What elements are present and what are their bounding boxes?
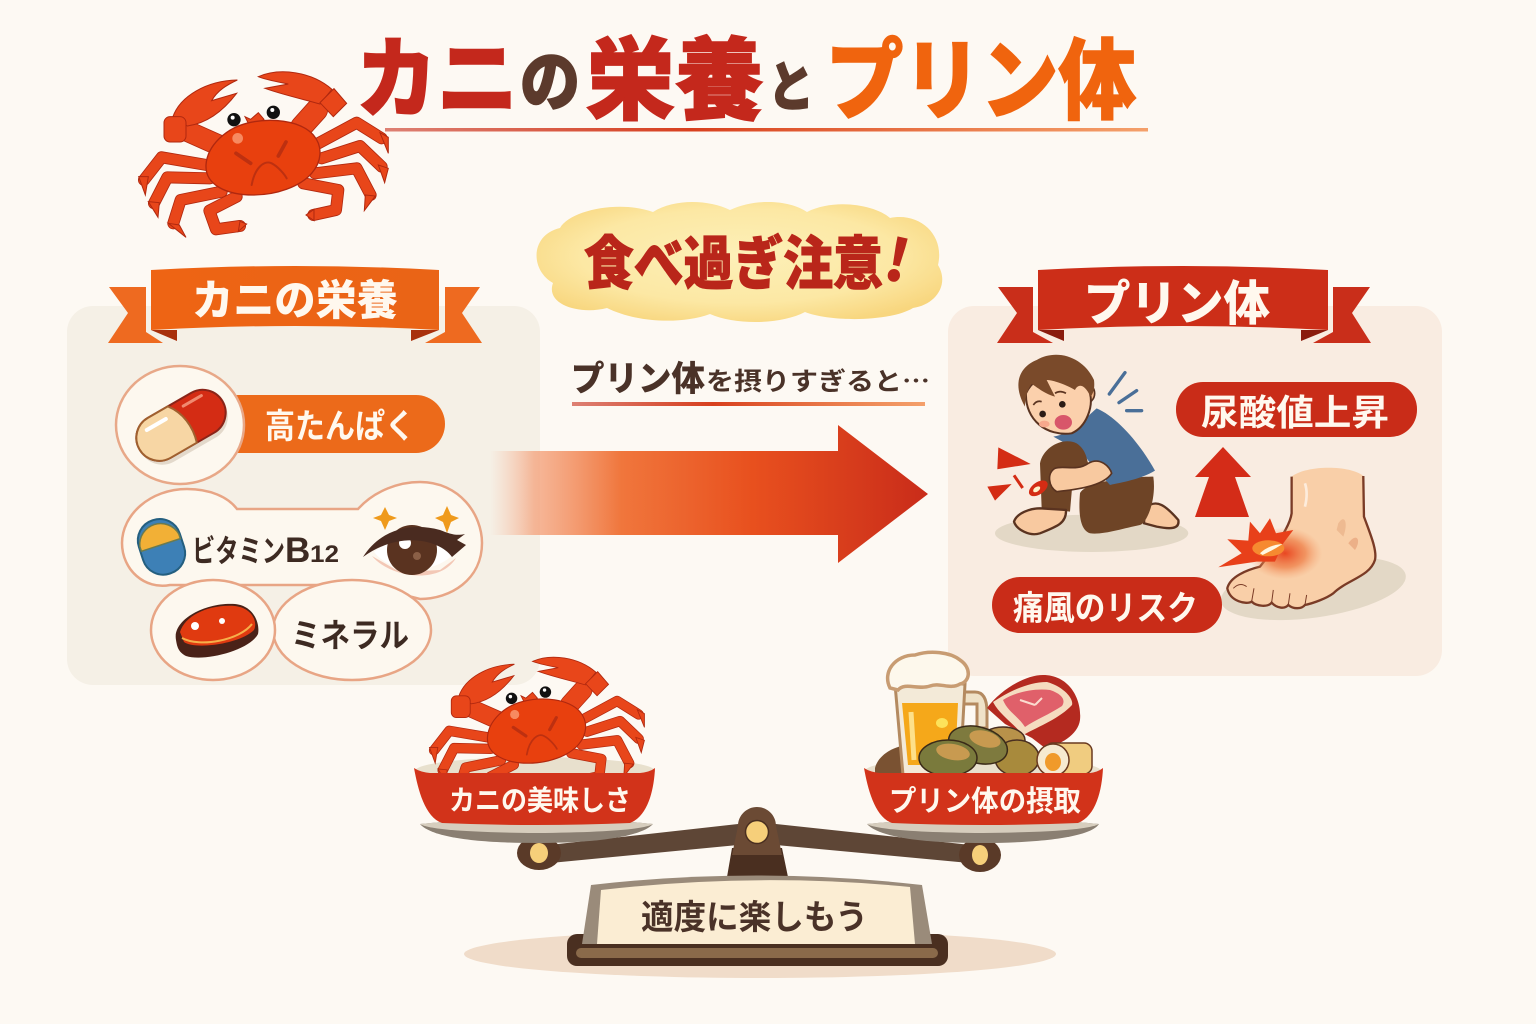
left bowl: [414, 768, 655, 825]
illustration: person holding knee: [987, 355, 1188, 552]
ribbon: nutrition heading: [108, 266, 482, 343]
panel: nutrition: [67, 306, 540, 685]
title: 栄養: [586, 8, 764, 138]
right bowl inside: [865, 757, 1101, 785]
plaque: [567, 876, 948, 966]
ribbon: purine heading: プリン体: [1084, 264, 1270, 334]
text: too much purine: を摂りすぎると…: [706, 362, 930, 398]
ribbon: nutrition heading: カニの栄養: [192, 267, 398, 328]
icon: mineral stone: [176, 604, 258, 658]
icon: vitamin capsule: [132, 514, 191, 580]
title: カニ: [356, 9, 518, 136]
icon: eye: [363, 506, 466, 576]
ribbon: purine heading: [997, 264, 1371, 343]
text: too much purine: [571, 351, 930, 406]
icon: crab (top): [139, 72, 388, 237]
icon: beer mug: [888, 652, 987, 775]
icon: foods: [919, 720, 1092, 776]
text: too much purine: プリン体: [571, 351, 705, 402]
right plate: [867, 818, 1099, 843]
left bowl: カニの美味しさ: [449, 779, 631, 819]
item: mineral: ミネラル: [291, 609, 409, 657]
title: と: [768, 43, 814, 122]
title underline: [385, 128, 1148, 132]
item: high protein: 高たんぱく: [265, 399, 415, 448]
plaque: 適度に楽しもう: [641, 890, 868, 939]
label: gout risk: 痛風のリスク: [1013, 581, 1198, 630]
arrow: [490, 425, 928, 563]
left plate: [420, 818, 653, 843]
item: vitamin B12: ビタミン: [192, 526, 285, 571]
item: vitamin B12: 12: [310, 541, 339, 568]
shadow under scale: [464, 930, 1056, 978]
item: vitamin B12: B: [285, 531, 310, 570]
left bowl inside: [415, 757, 655, 785]
illustration: balance scale: [414, 652, 1103, 966]
title: の: [520, 29, 580, 125]
item: high protein: [116, 366, 445, 484]
scale beam: [517, 807, 1001, 877]
title: [356, 8, 1136, 138]
panel: purine: [948, 306, 1442, 676]
arrow: up: [1195, 447, 1251, 517]
callout: eat too much caution cloud: !: [878, 213, 919, 300]
illustration: swollen foot: [1217, 468, 1410, 630]
icon: ham: [987, 675, 1080, 748]
icon: capsule: [128, 381, 237, 474]
callout: eat too much caution cloud: 食べ過ぎ注意: [584, 217, 883, 301]
crab on scale: [429, 657, 644, 800]
label: uric acid rise: 尿酸値上昇: [1201, 384, 1389, 436]
right bowl: [864, 768, 1103, 825]
right bowl: プリン体の摂取: [889, 778, 1081, 820]
callout: eat too much caution cloud: [537, 202, 942, 322]
item: mineral: [151, 580, 431, 680]
title: プリン体: [826, 11, 1136, 138]
item: vitamin B12: [122, 482, 482, 599]
